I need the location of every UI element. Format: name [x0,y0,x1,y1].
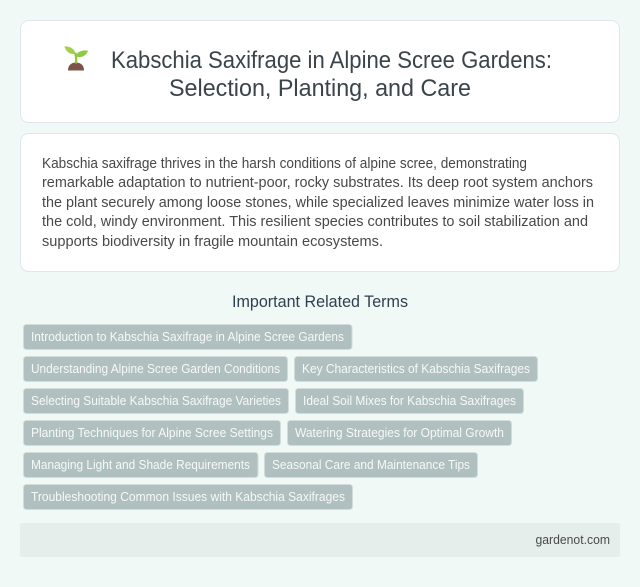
heading: related terms: Important Related Terms [232,293,408,311]
tag: planting: Planting Techniques for Alpine Scree Settings [31,425,273,440]
tag: introduction: Introduction to Kabschia Saxifrage in Alpine Scree Gardens [31,329,344,344]
tag: conditions [24,356,288,382]
tag: troubleshooting [24,484,352,510]
tag: planting [24,420,280,446]
tag: soil mixes: Ideal Soil Mixes for Kabschia Saxifrages [303,393,516,408]
footer [20,523,620,557]
panel: title card [20,20,620,122]
title: Selection, Planting, and Care [169,75,471,102]
description text: supports biodiversity in fragile mountain ecosystems. [42,234,383,250]
description text: the cold, windy environment. This resilient species contributes to soil stabilization and [42,214,588,230]
description text: Kabschia saxifrage thrives in the harsh conditions of alpine scree, demonstrating [42,156,527,172]
tag: characteristics [294,356,538,382]
tag: varieties [24,388,288,414]
description text [42,156,594,250]
tag: light and shade [24,452,258,478]
tag: soil mixes [296,388,524,414]
tag: troubleshooting: Troubleshooting Common Issues with Kabschia Saxifrages [31,489,345,504]
tag: watering: Watering Strategies for Optimal Growth [295,425,504,440]
title: Kabschia Saxifrage in Alpine Scree Gardens: [111,47,552,74]
title [111,47,552,102]
icon: sprout [64,46,88,70]
tag: light and shade: Managing Light and Shade Requirements [31,457,250,472]
tag: introduction [24,324,352,350]
tag: conditions: Understanding Alpine Scree Garden Conditions [31,361,280,376]
tag: seasonal care: Seasonal Care and Maintenance Tips [272,457,470,472]
description text: remarkable adaptation to nutrient-poor, rocky substrates. Its deep root system anchors [42,175,593,191]
footer site name: gardenot.com [536,533,610,547]
description text: the plant securely among loose stones, while specialized leaves minimize water loss in [42,195,594,211]
tag: seasonal care [264,452,478,478]
tag: watering [288,420,512,446]
related terms tags [24,324,538,510]
tag: varieties: Selecting Suitable Kabschia Saxifrage Varieties [31,393,281,408]
panel: description [20,134,620,272]
tag: characteristics: Key Characteristics of Kabschia Saxifrages [302,361,530,376]
